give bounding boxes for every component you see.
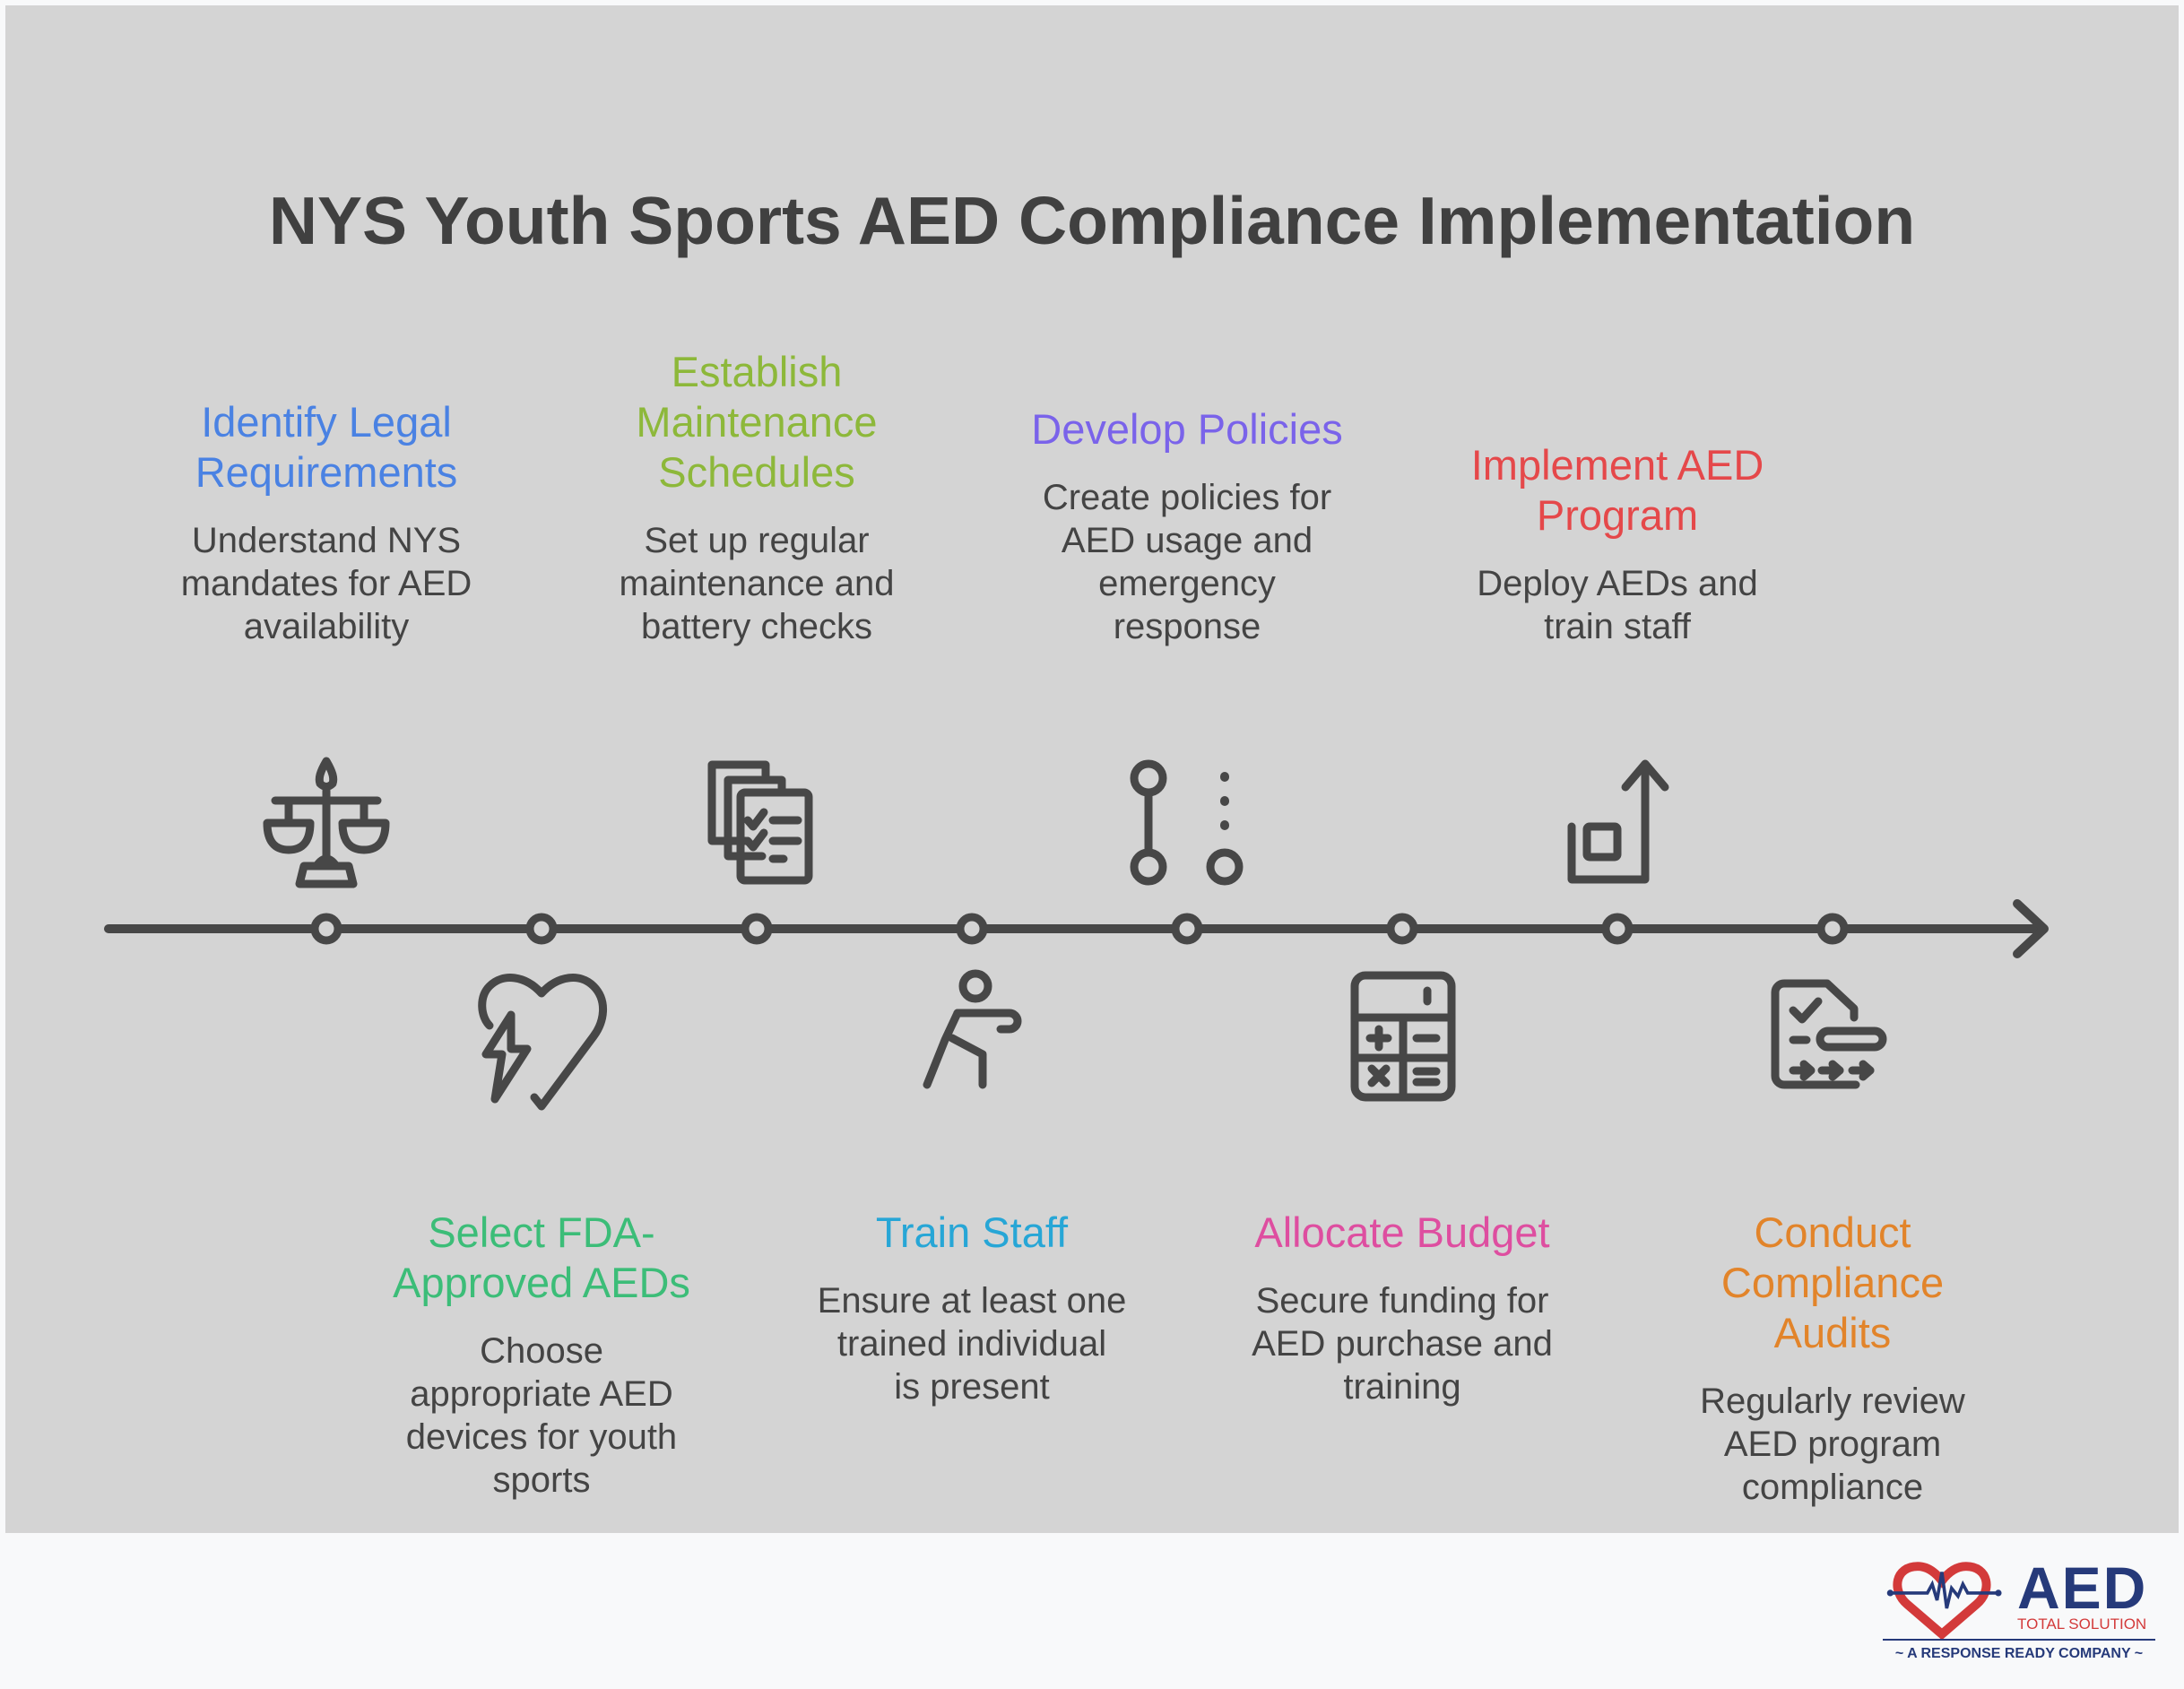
step 2: Select FDA-Approved AEDs: Choose (480, 1331, 603, 1371)
step 3: Establish Maintenance Schedules: Set up regular (644, 521, 870, 560)
icon: audit document (1775, 983, 1883, 1085)
step 4: Train Staff: Ensure at least one (818, 1281, 1126, 1321)
step 2: Select FDA-Approved AEDs: devices for youth (406, 1417, 677, 1457)
icon: checklist documents (712, 765, 809, 880)
step 1: Identify Legal Requirements: availability (244, 607, 409, 646)
logo heart (1886, 1562, 2001, 1639)
icon: runner (927, 974, 1018, 1085)
icon: policies branches (1134, 764, 1239, 881)
title: NYS Youth Sports AED Compliance Implementation (269, 183, 1915, 258)
step 3: Establish Maintenance Schedules: Establish (672, 348, 842, 395)
step 1: Identify Legal Requirements: Understand NYS (192, 521, 461, 560)
icon: calculator (1355, 975, 1452, 1097)
step 7: Implement AED Program: Program (1537, 491, 1698, 539)
step 4: Train Staff: Train Staff (876, 1208, 1068, 1256)
step 7: Implement AED Program: Implement AED (1471, 441, 1764, 489)
step 8: Conduct Compliance Audits: Conduct (1754, 1208, 1911, 1256)
step 5: Develop Policies: AED usage and (1062, 521, 1313, 560)
step 4: Train Staff: is present (894, 1367, 1050, 1407)
step 8: Conduct Compliance Audits: Compliance (1721, 1259, 1944, 1306)
step 2: Select FDA-Approved AEDs: Select FDA- (428, 1208, 655, 1256)
step 4: Train Staff: trained individual (837, 1324, 1106, 1364)
step 3: Establish Maintenance Schedules: battery checks (641, 607, 872, 646)
step 7: Implement AED Program: train staff (1544, 607, 1691, 646)
step 2: Select FDA-Approved AEDs: appropriate AED (410, 1374, 673, 1414)
step 6: Allocate Budget (1252, 1208, 1553, 1407)
step 6: Allocate Budget: training (1343, 1367, 1461, 1407)
step 2: Select FDA-Approved AEDs: sports (493, 1460, 590, 1500)
step 3: Establish Maintenance Schedules (620, 348, 894, 646)
step 8: Conduct Compliance Audits: compliance (1742, 1468, 1923, 1507)
step 6: Allocate Budget: Secure funding for (1256, 1281, 1548, 1321)
step 2: Select FDA-Approved AEDs: Approved AEDs (393, 1259, 690, 1306)
step 1: Identify Legal Requirements: Requirements (195, 448, 457, 496)
step 7: Implement AED Program (1471, 441, 1764, 646)
step 6: Allocate Budget: Allocate Budget (1254, 1208, 1550, 1256)
logo: TOTAL SOLUTION (2017, 1615, 2146, 1633)
step 6: Allocate Budget: AED purchase and (1252, 1324, 1553, 1364)
step 2: Select FDA-Approved AEDs (393, 1208, 690, 1500)
step 8: Conduct Compliance Audits: Audits (1774, 1309, 1891, 1356)
logo text: AED (2017, 1555, 2147, 1621)
timeline axis (108, 904, 2044, 954)
step 5: Develop Policies: Create policies for (1043, 478, 1331, 517)
logo: ~ A RESPONSE READY COMPANY ~ (1895, 1646, 2143, 1661)
step 5: Develop Policies: Develop Policies (1031, 405, 1343, 453)
icon: implement arrow (1572, 764, 1665, 879)
step 8: Conduct Compliance Audits (1700, 1208, 1965, 1507)
step 3: Establish Maintenance Schedules: maintenance and (620, 564, 894, 603)
step 3: Establish Maintenance Schedules: Schedules (658, 448, 855, 496)
step 1: Identify Legal Requirements: Identify Legal (201, 398, 452, 446)
logo (1883, 1555, 2155, 1661)
step 1: Identify Legal Requirements (181, 398, 472, 646)
step 5: Develop Policies (1031, 405, 1343, 646)
step 8: Conduct Compliance Audits: AED program (1724, 1425, 1941, 1464)
step 8: Conduct Compliance Audits: Regularly review (1700, 1382, 1965, 1421)
step 1: Identify Legal Requirements: mandates for AED (181, 564, 472, 603)
step 5: Develop Policies: emergency (1098, 564, 1276, 603)
step 7: Implement AED Program: Deploy AEDs and (1477, 564, 1758, 603)
icon: heart lightning (482, 978, 603, 1106)
step 4: Train Staff (818, 1208, 1126, 1407)
icon: scales (267, 761, 386, 884)
step 5: Develop Policies: response (1114, 607, 1261, 646)
step 3: Establish Maintenance Schedules: Maintenance (636, 398, 878, 446)
